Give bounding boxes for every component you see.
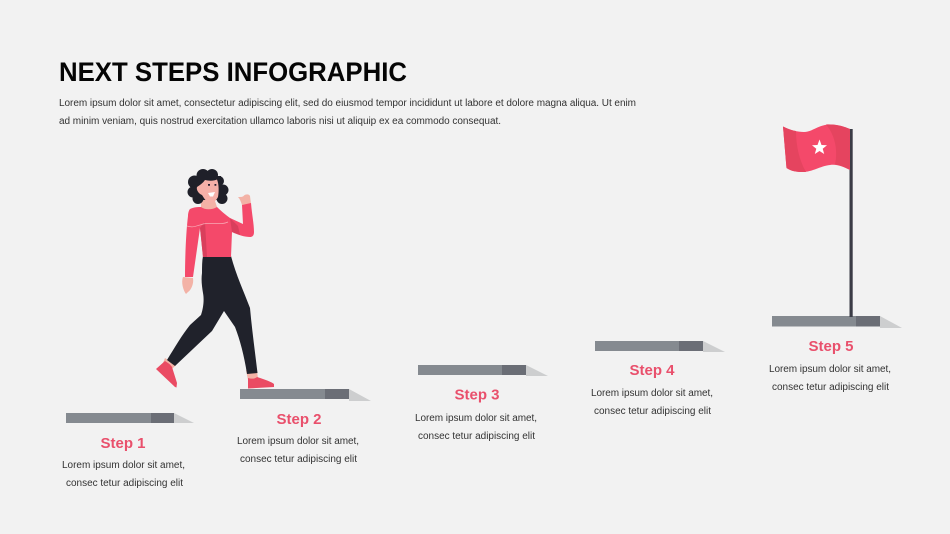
step 2 text: Lorem ipsum dolor sit amet, [237,436,359,447]
hair [188,169,228,204]
neck [201,198,217,209]
step 2 platform [240,389,371,401]
step 3 text [415,413,537,442]
step 4 platform [595,341,725,352]
step 3 [415,365,548,442]
step 2 text [237,436,359,465]
step 1 text: consec tetur adipiscing elit [66,478,183,489]
step 3 platform [418,365,548,376]
face [197,180,219,203]
title: NEXT STEPS INFOGRAPHIC [59,57,407,87]
step 4 text: consec tetur adipiscing elit [594,406,711,417]
step 5 text: consec tetur adipiscing elit [772,382,889,393]
step 2 label: Step 2 [276,411,322,428]
step 4 text: Lorem ipsum dolor sit amet, [591,388,713,399]
step 4 label: Step 4 [629,362,675,379]
step 4 [591,341,725,417]
skin: ankles [163,358,258,380]
step 3 text: Lorem ipsum dolor sit amet, [415,413,537,424]
leggings [167,256,258,374]
sweater [185,203,254,277]
step 5 text: Lorem ipsum dolor sit amet, [769,364,891,375]
eyes [208,184,216,186]
sweater shading [200,218,240,257]
step 5 text [769,364,891,393]
step 4 text [591,388,713,417]
step 1 platform [66,413,194,423]
step 1 [62,413,194,489]
icon: goal flag [783,124,853,317]
step 1 text: Lorem ipsum dolor sit amet, [62,460,185,471]
step 5 [769,316,902,393]
intro text: Lorem ipsum dolor sit amet, consectetur adipiscing elit, sed do eiusmod tempor incididunt ut labore et dolore magna aliqua. Ut enim [59,98,636,109]
step 5 platform [772,316,902,328]
hand right [238,194,251,205]
back shoe [156,361,177,388]
intro text: ad minim veniam, quis nostrud exercitation ullamco laboris nisi ut aliquip ex ea commodo consequat. [59,116,501,127]
intro text [59,98,636,127]
illustration: woman walking up steps [156,169,274,388]
sweater stripe [187,222,228,227]
front shoe [248,377,274,388]
step 2 [237,389,371,465]
step 3 label: Step 3 [454,386,500,404]
step 3 text: consec tetur adipiscing elit [418,431,535,442]
smile [208,192,215,196]
hand left [182,277,193,294]
step 1 label: Step 1 [100,435,146,452]
step 1 text [62,460,185,489]
step 5 label: Step 5 [808,338,854,355]
step 2 text: consec tetur adipiscing elit [240,454,357,465]
